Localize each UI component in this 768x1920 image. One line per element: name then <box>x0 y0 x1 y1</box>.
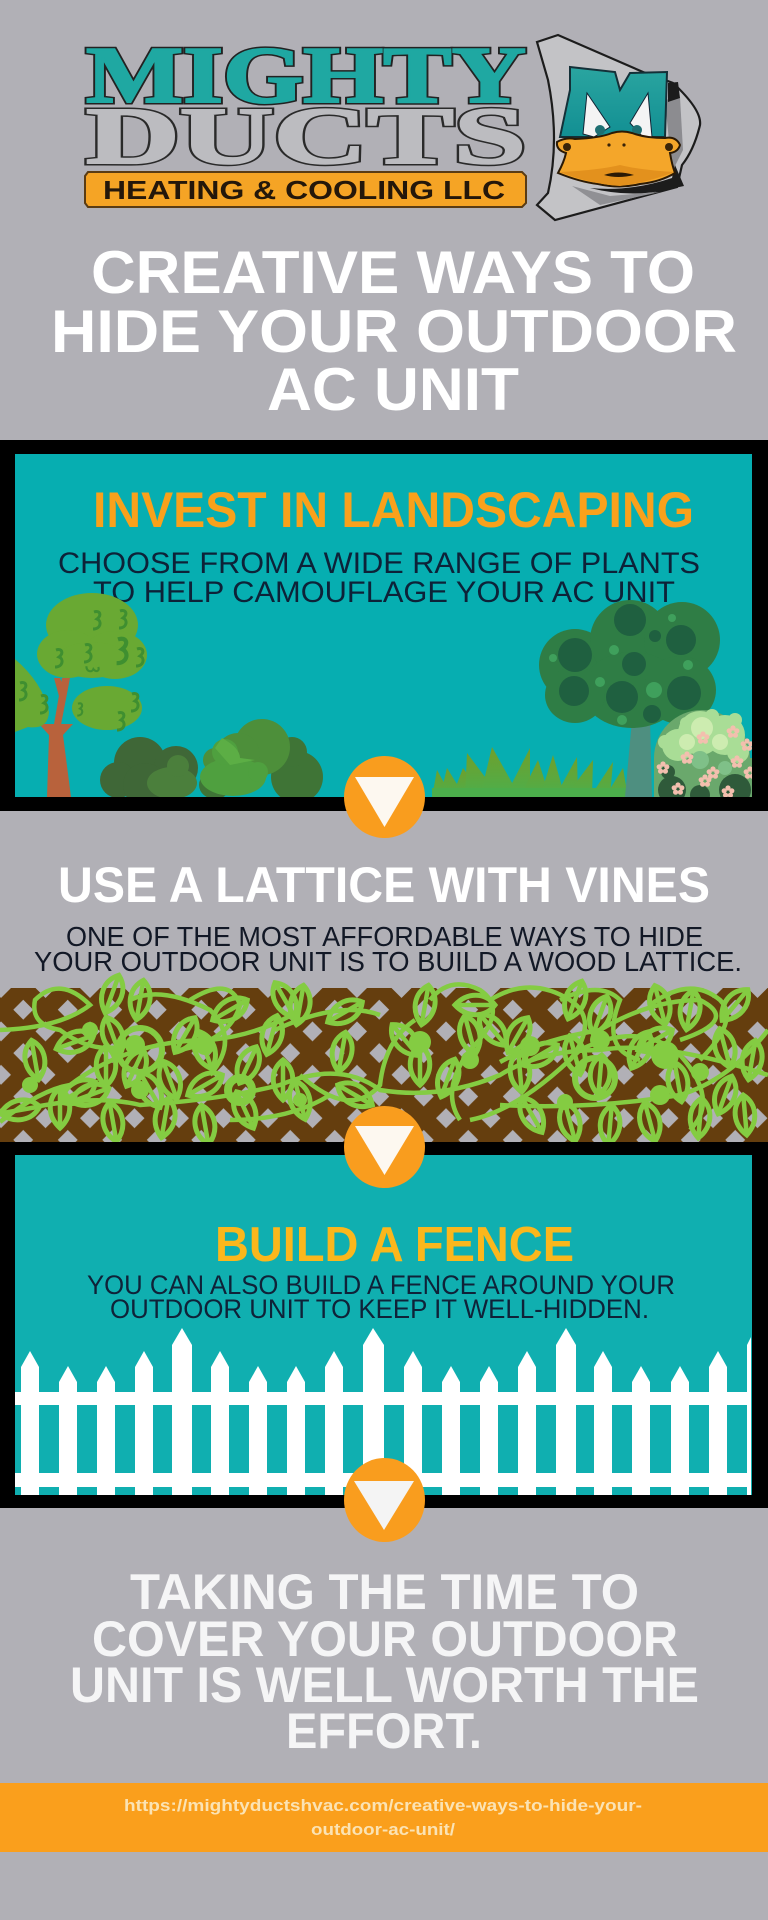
illustration: flowering bush <box>654 709 752 797</box>
logo wordmark MIGHTY: MIGHTY <box>86 30 526 120</box>
body text: plants <box>58 547 700 609</box>
illustration: right tree <box>539 600 720 797</box>
title <box>51 239 737 423</box>
closing statement: COVER YOUR OUTDOOR <box>92 1611 678 1667</box>
illustration: white picket fence <box>15 1328 751 1495</box>
title line 3: AC UNIT <box>267 356 519 423</box>
illustration: left tree <box>10 593 147 797</box>
panel: build a fence <box>0 1142 768 1508</box>
source URL: outdoor-ac-unit/ <box>311 1820 455 1839</box>
logo orange banner <box>85 172 526 207</box>
logo orange banner: HEATING & COOLING LLC <box>103 175 505 205</box>
illustration: grass <box>432 747 632 797</box>
logo wordmark MIGHTY: MIGHTY <box>86 30 526 120</box>
body text: plants: CHOOSE FROM A WIDE RANGE OF PLANTS <box>58 547 700 580</box>
body text: fence <box>87 1270 675 1324</box>
body text: fence: YOU CAN ALSO BUILD A FENCE AROUND YOUR <box>87 1270 675 1300</box>
section heading: use a lattice with vines: USE A LATTICE WITH VINES <box>58 857 710 913</box>
arrow: down marker 3 <box>344 1458 425 1542</box>
body text: lattice <box>34 921 742 977</box>
body text: plants: TO HELP CAMOUFLAGE YOUR AC UNIT <box>93 576 675 609</box>
body text: lattice: YOUR OUTDOOR UNIT IS TO BUILD A WOOD LATTICE. <box>34 946 742 977</box>
heading: build a fence: BUILD A FENCE <box>215 1218 574 1272</box>
panel: invest in landscaping <box>0 440 768 811</box>
logo wordmark DUCTS: DUCTS <box>86 91 526 181</box>
closing statement: EFFORT. <box>286 1703 482 1759</box>
logo wordmark DUCTS <box>86 91 526 181</box>
title line 2: HIDE YOUR OUTDOOR <box>51 298 737 365</box>
illustration: wood lattice <box>0 988 768 1144</box>
closing statement: UNIT IS WELL WORTH THE <box>70 1657 699 1713</box>
logo wordmark DUCTS: DUCTS <box>86 91 526 181</box>
source URL <box>124 1796 642 1839</box>
arrow: down marker 2 <box>344 1106 425 1188</box>
illustration: green vines <box>0 972 768 1146</box>
title line 1: CREATIVE WAYS TO <box>91 239 695 306</box>
logo: Mighty Ducts Heating & Cooling LLC <box>85 30 700 220</box>
body text: fence: OUTDOOR UNIT TO KEEP IT WELL-HIDDEN. <box>110 1294 649 1324</box>
footer bar with source URL <box>0 1783 768 1852</box>
source URL: https://mightyductshvac.com/creative-ways-to-hide-your- <box>124 1796 642 1815</box>
heading: invest in landscaping: INVEST IN LANDSCAPING <box>93 482 694 538</box>
arrow: down marker 1 <box>344 756 425 838</box>
icon: duck mascot on duct <box>537 35 700 220</box>
closing statement <box>70 1564 699 1759</box>
illustration: bushes <box>100 719 323 797</box>
body text: lattice: ONE OF THE MOST AFFORDABLE WAYS TO HIDE <box>66 921 703 952</box>
closing statement: TAKING THE TIME TO <box>130 1564 639 1620</box>
